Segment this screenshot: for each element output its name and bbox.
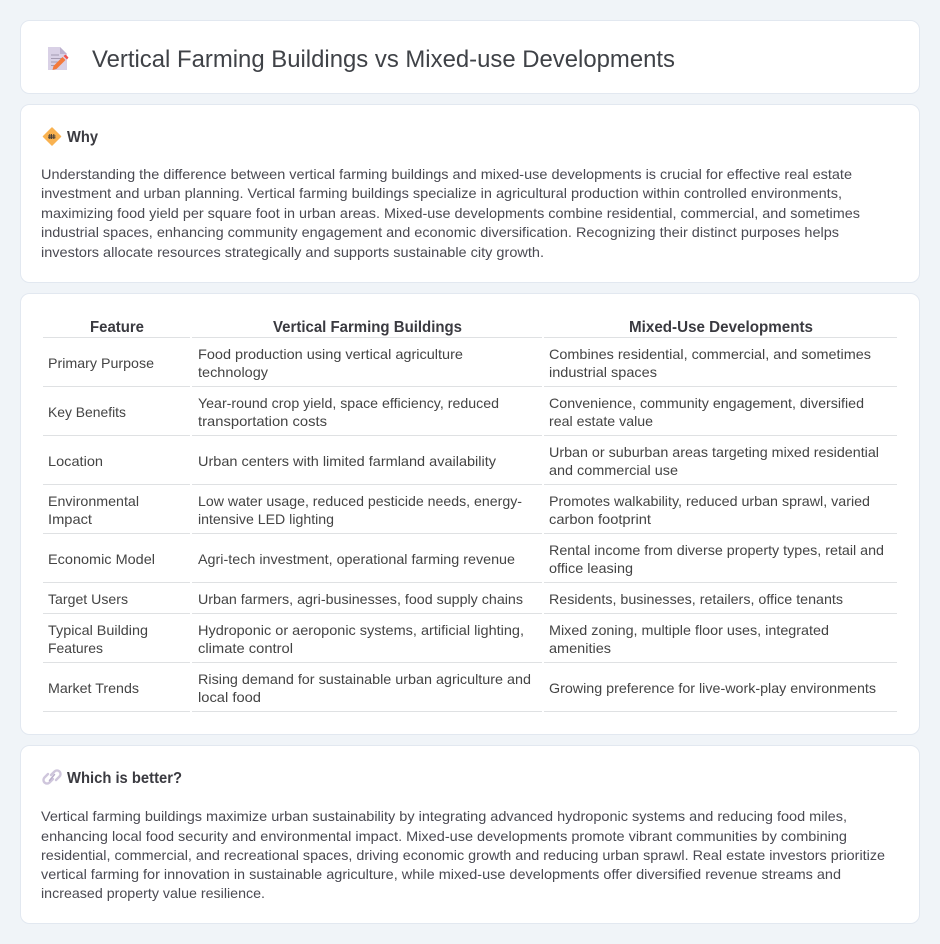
table row: location <box>48 444 879 478</box>
panel: which is better <box>20 746 920 924</box>
table row: primary purpose: Combines residential, commercial, and sometimes <box>549 346 871 362</box>
paragraph: why <box>41 166 860 260</box>
table row: primary purpose <box>48 346 871 380</box>
table row: location: Urban centers with limited farmland availability <box>198 453 496 469</box>
table row: economic model <box>48 542 884 576</box>
table row: key benefits: transportation costs <box>198 413 327 429</box>
table row: market trends: Growing preference for live-work-play environments <box>549 680 876 696</box>
icon: chain link <box>43 770 61 784</box>
paragraph: which is better: increased property value resilience. <box>41 885 265 901</box>
table row: key benefits: Convenience, community engagement, diversified <box>549 395 864 411</box>
table row: typical building features: climate control <box>198 640 293 656</box>
paragraph: which is better: residential, commercial, and recreational spaces, driving economic growth and reducing urban sprawl. Real estate investors prioritize <box>41 847 885 863</box>
heading: which is better: Which is better? <box>67 770 182 787</box>
table row: target users: Urban farmers, agri-businesses, food supply chains <box>198 591 523 607</box>
paragraph: why: Understanding the difference between vertical farming buildings and mixed-use developments is crucial for effective real estate <box>41 166 852 182</box>
table header row: Feature <box>90 319 144 336</box>
table row: economic model: office leasing <box>549 560 633 576</box>
table row: key benefits: real estate value <box>549 413 653 429</box>
table row: economic model: Agri-tech investment, operational farming revenue <box>198 551 515 567</box>
table row: environmental impact: intensive LED lighting <box>198 511 334 527</box>
paragraph: which is better: Vertical farming buildings maximize urban sustainability by integrating advanced hydroponic systems and reducing food miles, <box>41 808 847 824</box>
table row: typical building features: Features <box>48 640 103 656</box>
table row: primary purpose: Food production using vertical agriculture <box>198 346 463 362</box>
paragraph: which is better <box>41 808 885 901</box>
table row: typical building features: amenities <box>549 640 611 656</box>
table row: target users <box>48 591 843 607</box>
table row: environmental impact <box>48 493 870 527</box>
table row: target users: Residents, businesses, retailers, office tenants <box>549 591 843 607</box>
table header row <box>90 319 813 336</box>
paragraph: which is better: vertical farming for innovation in sustainable agriculture, while mixed-use developments offer diversified revenue streams and <box>41 866 841 882</box>
table row: location: Urban or suburban areas targeting mixed residential <box>549 444 879 460</box>
table row: target users: Target Users <box>48 591 128 607</box>
panel: comparison table <box>20 294 920 734</box>
table row: environmental impact: Environmental <box>48 493 139 509</box>
table row: environmental impact: Impact <box>48 511 92 527</box>
paragraph: why: investors allocate resources strategically and supports sustainable city growth. <box>41 244 544 260</box>
table row: location: and commercial use <box>549 462 678 478</box>
table row: key benefits <box>48 395 864 429</box>
table row: primary purpose: industrial spaces <box>549 364 657 380</box>
table row: economic model: Economic Model <box>48 551 155 567</box>
title: Vertical Farming Buildings vs Mixed-use Developments <box>92 46 675 73</box>
table row: economic model: Rental income from diverse property types, retail and <box>549 542 884 558</box>
icon: document with pencil <box>48 47 68 70</box>
table row: market trends <box>48 671 876 705</box>
table row: primary purpose: technology <box>198 364 268 380</box>
table row: market trends: Rising demand for sustainable urban agriculture and <box>198 671 531 687</box>
paragraph: why: industrial spaces, enhancing community engagement and economic diversification. Recognizing their distinct purposes helps <box>41 224 839 240</box>
table row: typical building features <box>48 622 829 656</box>
table row: key benefits: Key Benefits <box>48 404 126 420</box>
table row: typical building features: Hydroponic or aeroponic systems, artificial lighting, <box>198 622 524 638</box>
paragraph: why: investment and urban planning. Vertical farming buildings specialize in agricultural production within controlled environments, <box>41 185 842 201</box>
table row: location: Location <box>48 453 103 469</box>
table row: market trends: local food <box>198 689 261 705</box>
panel: why <box>20 104 920 282</box>
table row: typical building features: Typical Building <box>48 622 148 638</box>
table header row: Vertical Farming Buildings <box>273 319 462 336</box>
paragraph: why: maximizing food yield per square foot in urban areas. Mixed-use developments combine residential, commercial, and sometimes <box>41 205 860 221</box>
table row: environmental impact: carbon footprint <box>549 511 651 527</box>
table row: market trends: Market Trends <box>48 680 139 696</box>
table row: environmental impact: Low water usage, reduced pesticide needs, energy- <box>198 493 522 509</box>
heading: why: Why <box>67 129 98 146</box>
table row: typical building features: Mixed zoning, multiple floor uses, integrated <box>549 622 829 638</box>
icon: orange diamond sign <box>44 128 60 145</box>
table row: primary purpose: Primary Purpose <box>48 355 154 371</box>
table row: key benefits: Year-round crop yield, space efficiency, reduced <box>198 395 499 411</box>
table row: environmental impact: Promotes walkability, reduced urban sprawl, varied <box>549 493 870 509</box>
table header row: Mixed-Use Developments <box>629 319 813 336</box>
paragraph: which is better: enhancing local food security and environmental impact. Mixed-use developments promote vibrant communities by combining <box>41 828 847 844</box>
panel: title header <box>20 20 920 94</box>
